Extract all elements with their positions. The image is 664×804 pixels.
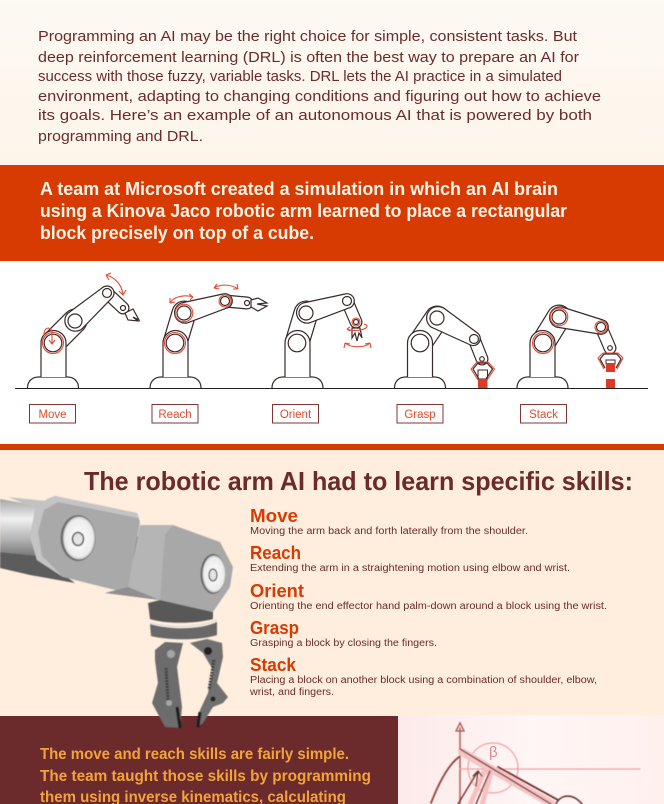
banner: Microsoft team: A team at Microsoft created a simulation in which an AI brain xyxy=(40,179,558,199)
label: Stack: Stack xyxy=(529,409,558,421)
icon: Grasp arm xyxy=(394,307,494,388)
skill: Grasp: Grasp xyxy=(250,618,299,638)
skill: Grasp: Grasping a block by closing the fingers. xyxy=(250,638,437,649)
skill: Stack: Stack xyxy=(250,655,297,675)
skill: Stack: Placing a block on another block using a combination of shoulder, elbow, xyxy=(250,675,597,686)
intro text: success with those fuzzy, variable tasks. DRL lets the AI practice in a simulated xyxy=(38,68,562,85)
label: Orient: Orient xyxy=(280,409,312,421)
skill: Grasp xyxy=(250,618,437,649)
label: Orient xyxy=(272,404,318,423)
panel: move and reach text: The team taught those skills by programming xyxy=(40,768,371,785)
skill: Move: Move xyxy=(250,506,298,526)
heading: The robotic arm AI had to learn specific skills: xyxy=(84,466,633,496)
wrist collar xyxy=(148,600,213,623)
skill: Orient xyxy=(250,581,607,612)
skill: Reach: Extending the arm in a straightening motion using elbow and wrist. xyxy=(250,563,570,574)
banner: Microsoft team: block precisely on top of a cube. xyxy=(40,223,314,243)
illustration: inverse kinematics sketch: β xyxy=(489,744,498,761)
rear housing xyxy=(30,496,140,592)
intro text: its goals. Here’s an example of an autonomous AI that is powered by both xyxy=(38,107,592,124)
icon: Reach arm xyxy=(150,284,267,388)
label: Grasp: Grasp xyxy=(404,409,436,421)
panel: introduction xyxy=(0,0,664,165)
gripper fingers xyxy=(152,642,183,728)
skill: Stack xyxy=(249,655,597,698)
label: Move xyxy=(30,404,76,423)
panel: move and reach text xyxy=(0,716,398,804)
panel: move and reach text: The move and reach skills are fairly simple. xyxy=(40,746,349,763)
intro text: programming and DRL. xyxy=(38,128,203,145)
intro text: deep reinforcement learning (DRL) is often the best way to prepare an AI for xyxy=(38,49,579,66)
banner: Microsoft team: using a Kinova Jaco robotic arm learned to place a rectangular xyxy=(40,201,567,221)
label: Stack xyxy=(520,404,566,423)
intro text: Programming an AI may be the right choice for simple, consistent tasks. But xyxy=(38,28,578,45)
ground line xyxy=(15,388,648,390)
panel: robot arm skill diagram xyxy=(0,261,664,444)
label: Grasp xyxy=(397,404,443,423)
front joint disk xyxy=(200,554,226,594)
intro text: environment, adapting to changing conditions and figuring out how to achieve xyxy=(38,88,601,105)
skill: Move: Moving the arm back and forth laterally from the shoulder. xyxy=(250,526,528,537)
skill: Move xyxy=(250,506,528,537)
rear joint disk xyxy=(60,515,96,561)
icon: Move arm xyxy=(28,273,139,388)
skill: Reach xyxy=(250,543,570,574)
label: Move: Move xyxy=(38,409,67,421)
skill: Orient: Orienting the end effector hand palm-down around a block using the wrist. xyxy=(250,601,607,612)
label: Reach xyxy=(152,404,198,423)
skill: Reach: Reach xyxy=(250,543,301,563)
icon: Orient arm xyxy=(272,294,371,388)
panel: specific skills xyxy=(0,450,664,716)
front housing xyxy=(105,525,233,612)
photo: Kinova robotic arm xyxy=(0,496,233,728)
intro text xyxy=(38,28,601,145)
divider bar xyxy=(0,444,664,450)
icon: Stack arm xyxy=(517,307,623,388)
banner: Microsoft team xyxy=(0,165,664,261)
illustration: inverse kinematics sketch xyxy=(398,715,664,804)
skill: Stack: wrist, and fingers. xyxy=(249,687,334,698)
skill: Orient: Orient xyxy=(250,581,304,601)
arm shaft xyxy=(0,499,45,556)
label: Reach: Reach xyxy=(158,409,192,421)
elbow connector xyxy=(130,535,148,592)
